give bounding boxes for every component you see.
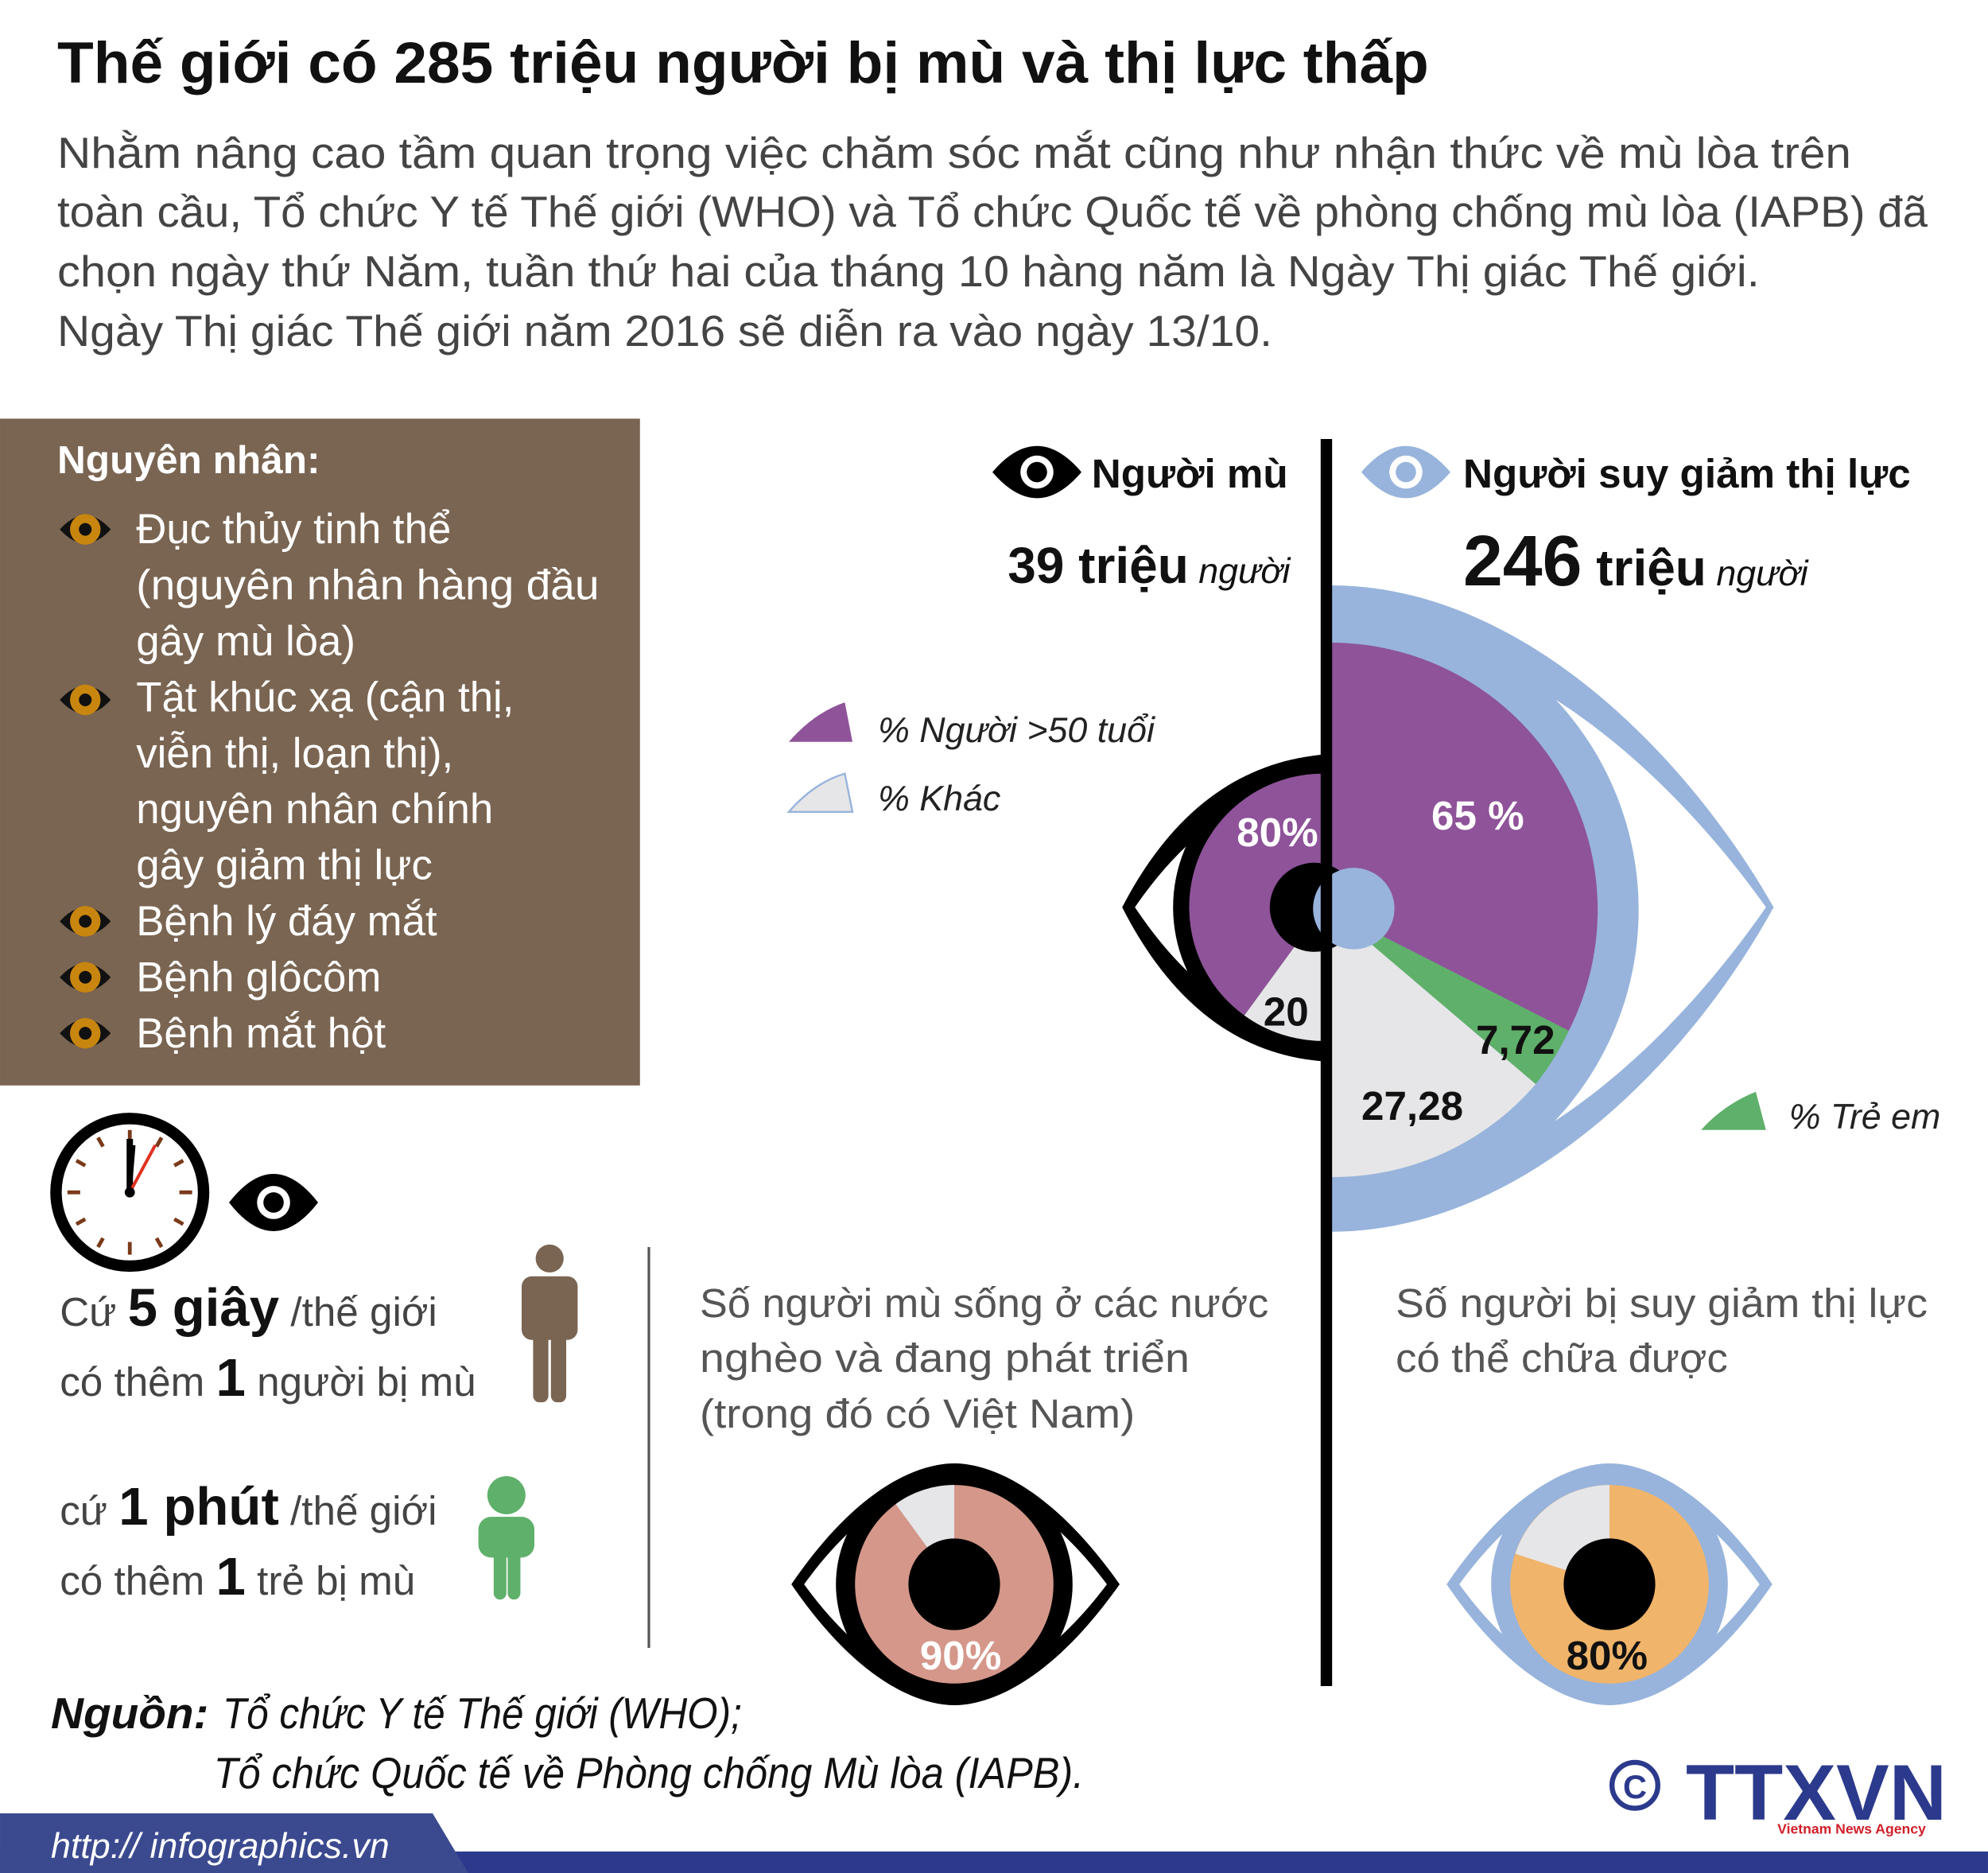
panel: causes: viễn thị, loạn thị), (136, 730, 453, 777)
panel: causes: gây mù lòa) (136, 618, 355, 665)
header: blind: Người mù (1092, 451, 1288, 496)
panel: causes: gây giảm thị lực (136, 842, 433, 889)
header: low vision: 246 triệu người (1463, 521, 1809, 600)
stat: every 1 minute (60, 1477, 437, 1607)
legend: % Người >50 tuổi (878, 710, 1155, 750)
stat: every 5 seconds (60, 1278, 476, 1408)
header: low vision (1361, 446, 1911, 600)
source: Tổ chức Quốc tế về Phòng chống Mù lòa (IAPB). (214, 1749, 1084, 1797)
chart: blind half eye (1122, 755, 1323, 1061)
panel: causes: (nguyên nhân hàng đầu (136, 562, 600, 609)
intro paragraph: chọn ngày thứ Năm, tuần thứ hai của tháng 10 hàng năm là Ngày Thị giác Thế giới. (57, 247, 1760, 296)
icon: clock (56, 1118, 204, 1266)
icon: adult person (522, 1245, 577, 1402)
panel: causes (0, 418, 640, 1086)
source (51, 1689, 1084, 1797)
source: Nguồn: (51, 1689, 208, 1738)
chart: low vision big half eye: 27,28 (1361, 1083, 1463, 1129)
legend: % Khác (878, 779, 1000, 818)
chart: 80% eye (1446, 1463, 1773, 1705)
pupils (1270, 863, 1395, 952)
chart: low vision big half eye (1331, 585, 1773, 1232)
logo: TTXVN: TTXVN (1686, 1749, 1947, 1837)
chart: 90% eye (791, 1463, 1120, 1705)
intro paragraph (57, 129, 1928, 356)
legend: % Trẻ em (1789, 1097, 1940, 1137)
header: low vision: Người suy giảm thị lực (1463, 451, 1911, 496)
text: poor countries: nghèo và đang phát triển (700, 1335, 1190, 1381)
chart: blind half eye: 80% (1237, 810, 1318, 855)
text: poor countries: Số người mù sống ở các nước (700, 1280, 1268, 1326)
footer band: http:// infographics.vn (51, 1826, 390, 1866)
center divider (1321, 439, 1332, 1686)
source: Tổ chức Y tế Thế giới (WHO); (223, 1689, 742, 1738)
intro paragraph: Ngày Thị giác Thế giới năm 2016 sẽ diễn ra vào ngày 13/10. (57, 307, 1272, 356)
logo: TTXVN: C (1623, 1768, 1647, 1805)
legend (789, 702, 1940, 1137)
logo: TTXVN: Vietnam News Agency (1777, 1821, 1926, 1837)
text: curable: Số người bị suy giảm thị lực (1396, 1280, 1928, 1326)
panel: causes: Bệnh glôcôm (136, 954, 381, 1001)
stat: every 5 seconds: Cứ 5 giây /thế giới (60, 1278, 437, 1338)
header: blind (992, 446, 1291, 594)
panel: causes: Tật khúc xạ (cận thị, (136, 674, 514, 721)
intro paragraph: toàn cầu, Tổ chức Y tế Thế giới (WHO) và Tổ chức Quốc tế về phòng chống mù lòa (IAPB) đã (57, 188, 1928, 236)
icon: child (479, 1476, 534, 1599)
intro paragraph: Nhằm nâng cao tầm quan trọng việc chăm sóc mắt cũng như nhận thức về mù lòa trên (57, 129, 1851, 177)
text: curable: có thể chữa được (1396, 1335, 1728, 1381)
chart: low vision big half eye: 7,72 (1476, 1017, 1555, 1063)
panel: causes: Bệnh mắt hột (136, 1010, 386, 1057)
panel: causes: Đục thủy tinh thể (136, 506, 451, 553)
footer band (0, 1813, 1988, 1873)
panel: causes: Bệnh lý đáy mắt (136, 898, 437, 945)
text: poor countries: (trong đó có Việt Nam) (700, 1391, 1135, 1436)
text: curable (1396, 1280, 1928, 1381)
stat: every 1 minute: có thêm 1 trẻ bị mù (60, 1547, 415, 1607)
chart: 80% eye: 80% (1567, 1633, 1648, 1678)
stat: every 5 seconds: có thêm 1 người bị mù (60, 1348, 476, 1408)
panel: causes: nguyên nhân chính (136, 786, 493, 833)
header: blind: 39 triệu người (1008, 537, 1291, 594)
chart: 90% eye: 90% (920, 1633, 1001, 1678)
text: poor countries (700, 1280, 1268, 1436)
chart: blind half eye: 20 (1264, 989, 1309, 1035)
title: Thế giới có 285 triệu người bị mù và thị lực thấp (57, 29, 1429, 95)
chart: low vision big half eye: 65 % (1431, 793, 1524, 838)
panel: causes: Nguyên nhân: (57, 437, 320, 482)
icon: black eye (229, 1174, 318, 1231)
stat: every 1 minute: cứ 1 phút /thế giới (60, 1477, 437, 1537)
